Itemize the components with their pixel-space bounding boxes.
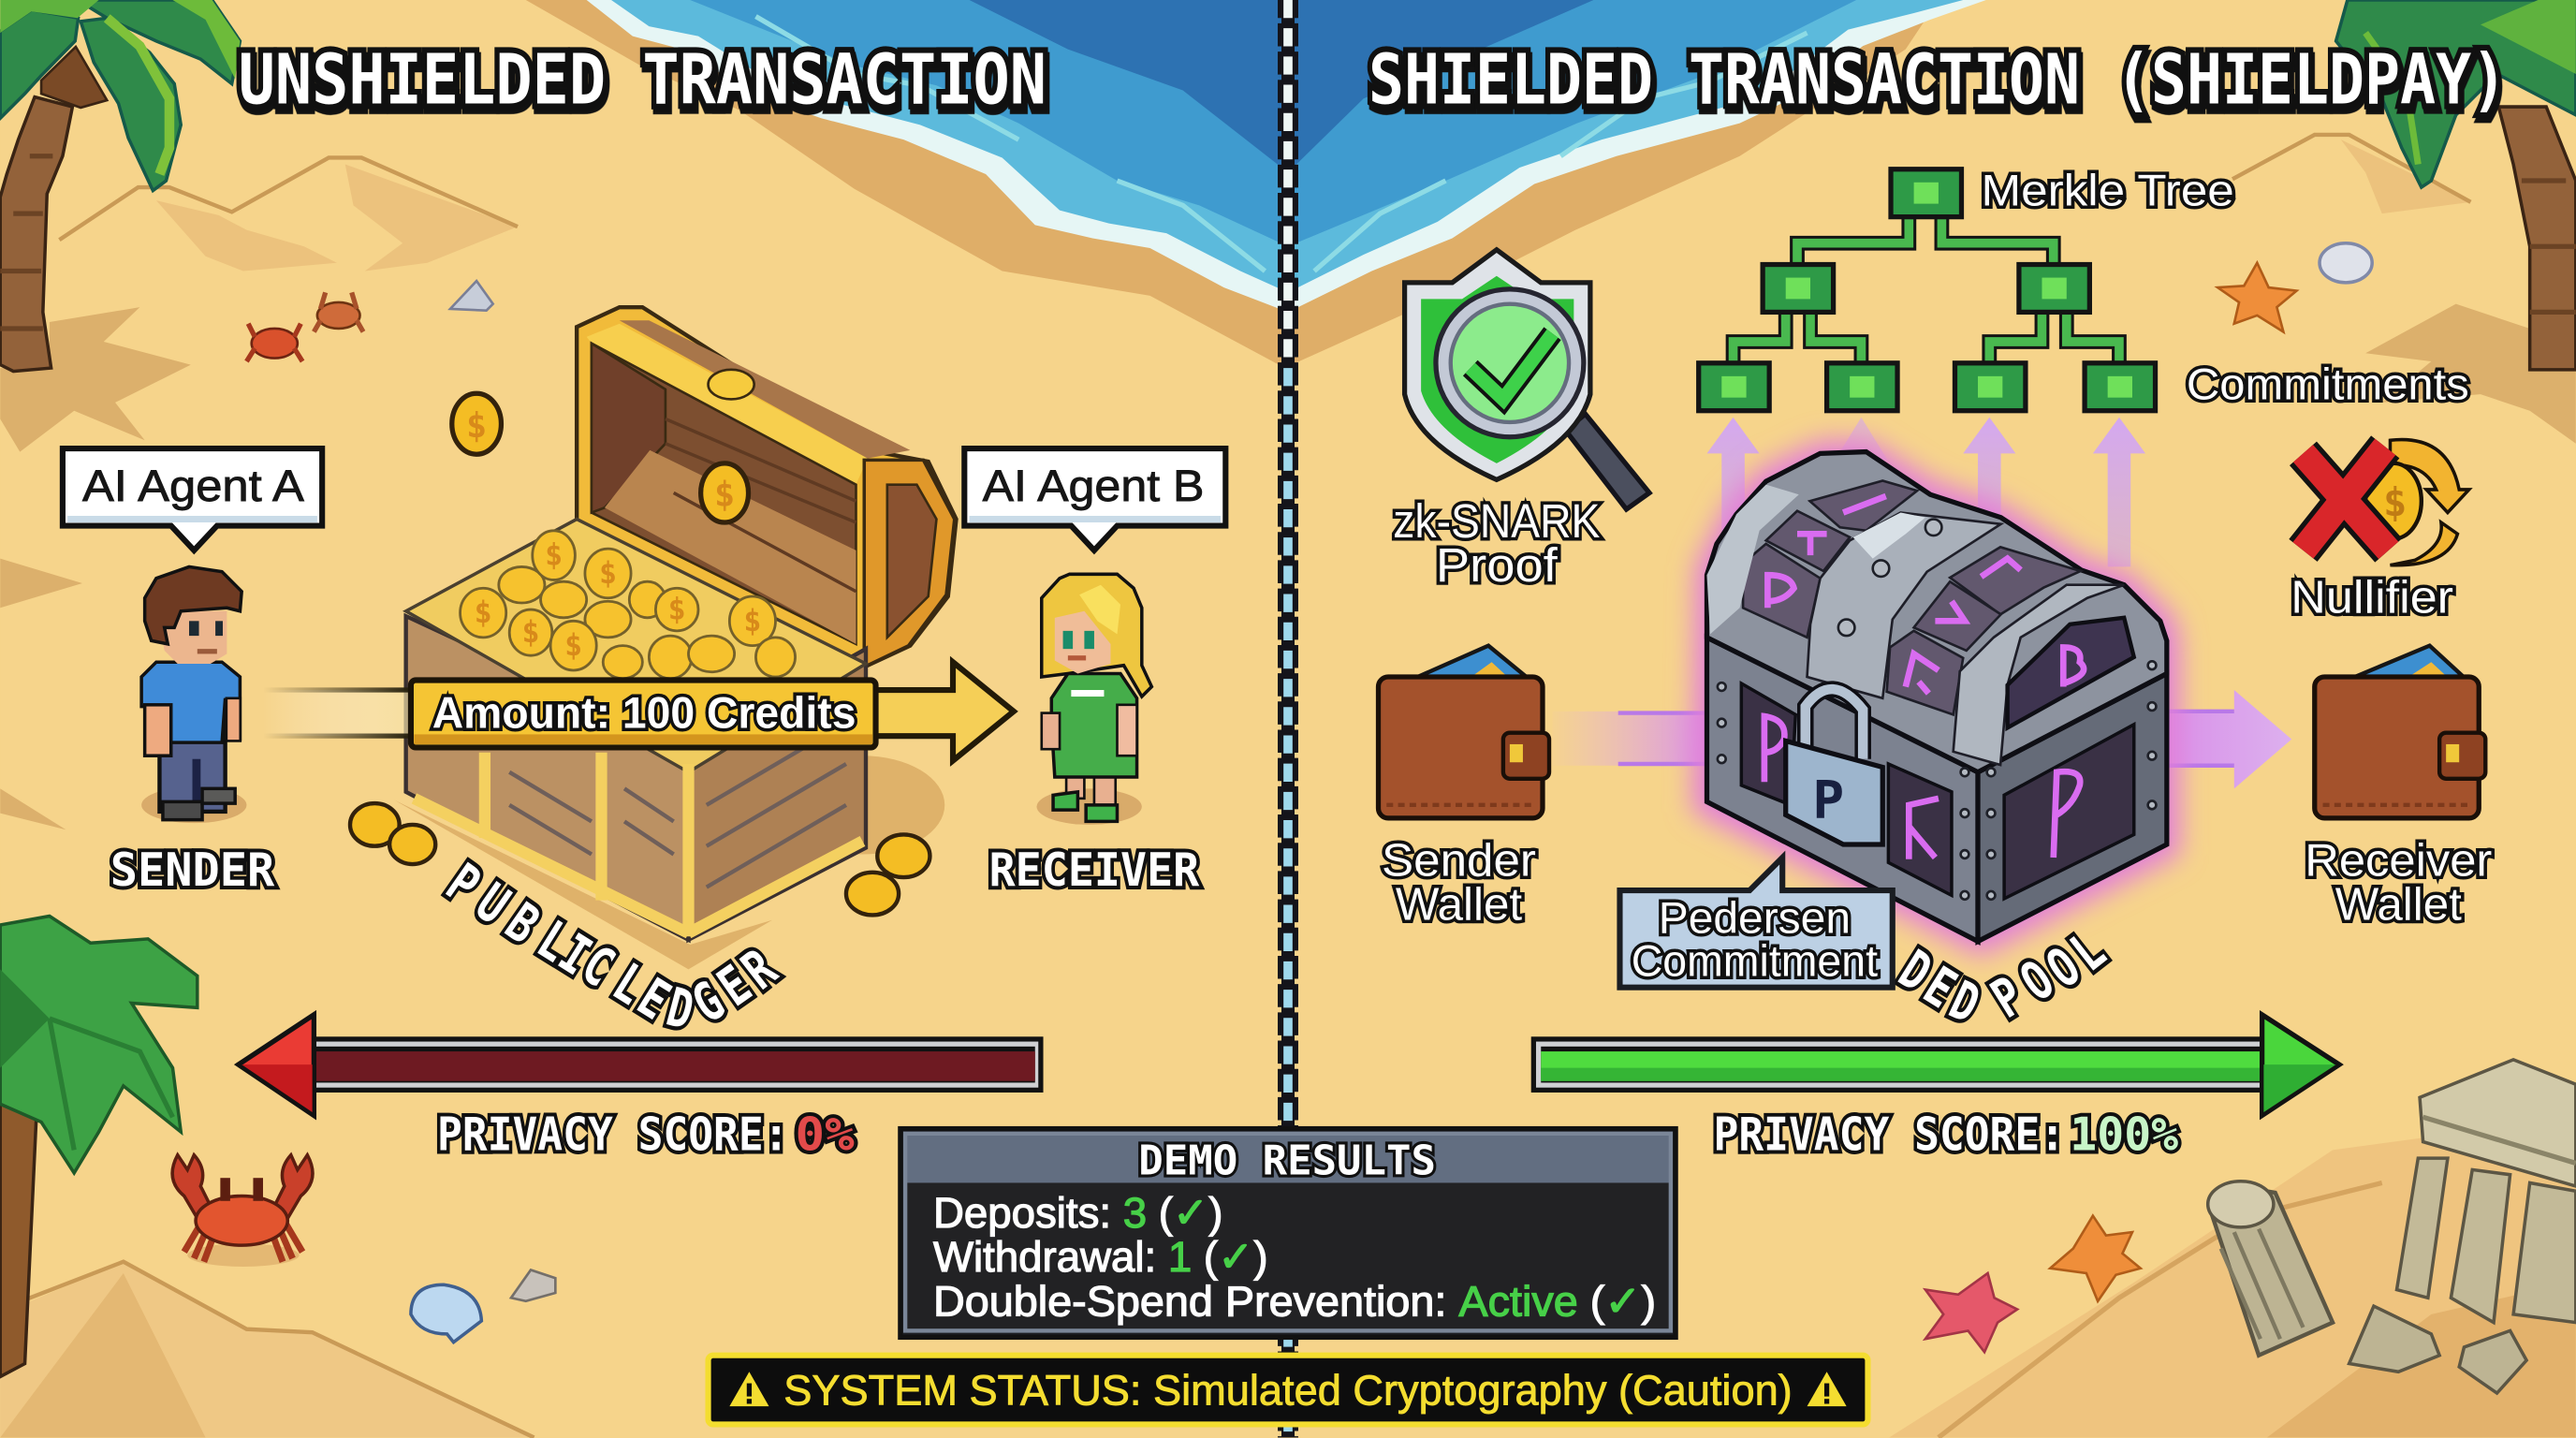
curved label: shielded pool: O bbox=[2036, 935, 2091, 1000]
curved label: public ledger: L bbox=[527, 908, 580, 975]
coin symbols: $ bbox=[743, 605, 761, 638]
label: zk-SNARK Proof bbox=[1393, 494, 1600, 592]
speech bubble: AI Agent B bbox=[964, 448, 1225, 550]
coin symbols: $ bbox=[545, 539, 563, 573]
label: Merkle Tree: Merkle Tree bbox=[1982, 166, 2234, 215]
character: receiver bbox=[1037, 574, 1151, 825]
status bar: system status bbox=[709, 1356, 1867, 1424]
speech bubble: AI Agent A bbox=[63, 448, 322, 550]
warning icon bbox=[729, 1372, 768, 1406]
callout: Pedersen Commitment: Pedersen bbox=[1659, 894, 1851, 944]
coin symbols: $ bbox=[522, 616, 540, 650]
label: receiver wallet: Receiver bbox=[2305, 835, 2492, 886]
label: zk-SNARK Proof: zk-SNARK bbox=[1393, 494, 1600, 548]
palm tree top right bbox=[2336, 0, 2576, 370]
coin symbols: $ bbox=[668, 594, 686, 627]
shell bbox=[2320, 243, 2372, 283]
purple flow into chest bbox=[1553, 712, 1717, 766]
curved label: public ledger bbox=[435, 851, 788, 1042]
panel: demo results bbox=[900, 1129, 1676, 1337]
panel: demo results: Withdrawal: 1 (✓) bbox=[933, 1233, 1268, 1281]
curved label: shielded pool: P bbox=[1981, 964, 2034, 1030]
privacy score left: 0% bbox=[796, 1107, 855, 1161]
amount label bbox=[411, 680, 876, 747]
label: sender wallet: Wallet bbox=[1396, 880, 1522, 931]
end panel bbox=[2008, 618, 2134, 727]
treasure chest: public ledger bbox=[394, 307, 957, 969]
padlock: P bbox=[1812, 770, 1844, 831]
starfish bbox=[2050, 1216, 2141, 1301]
privacy score right: PRIVACY SCORE: bbox=[1714, 1107, 2065, 1161]
curved label: shielded pool: E bbox=[1842, 915, 1877, 980]
nullifier icon: $ bbox=[2383, 479, 2407, 525]
panel: demo results: Double-Spend Prevention: Active (✓) bbox=[933, 1278, 1656, 1326]
merkle tree bbox=[1699, 169, 2156, 411]
warning icon bbox=[1808, 1372, 1847, 1406]
label: sender wallet: Sender bbox=[1382, 835, 1536, 886]
curved label: shielded pool: E bbox=[1913, 955, 1967, 1020]
rivets bbox=[1718, 520, 2156, 900]
curved label: shielded pool: O bbox=[2009, 948, 2065, 1013]
curved label: shielded pool: I bbox=[1822, 912, 1857, 977]
curved label: public ledger: L bbox=[603, 951, 656, 1017]
curved label: shielded pool: H bbox=[1800, 910, 1835, 976]
character: sender bbox=[141, 566, 246, 823]
speech bubble: AI Agent B: AI Agent B bbox=[983, 462, 1205, 511]
label: sender wallet bbox=[1382, 835, 1536, 931]
privacy score right: 100% bbox=[2070, 1107, 2179, 1161]
floating coin bbox=[452, 393, 501, 454]
amount label: Amount: 100 Credits bbox=[432, 688, 856, 738]
small crab bbox=[314, 292, 363, 331]
palm shadows bbox=[0, 304, 2576, 829]
transfer arrow with amount bbox=[263, 662, 1014, 760]
heading: DEMO RESULTS bbox=[1138, 1137, 1436, 1185]
rock bbox=[511, 1269, 555, 1301]
metal chest: shielded pool bbox=[1692, 440, 2180, 956]
curved label: public ledger: U bbox=[465, 871, 520, 936]
curved label: public ledger: P bbox=[435, 851, 491, 917]
curved label: shielded pool: L bbox=[1857, 917, 1901, 983]
upward commitment arrows bbox=[1706, 418, 2145, 566]
left panel title: UNSHIELDED TRANSACTION bbox=[239, 41, 1046, 121]
floating coin: $ bbox=[714, 474, 735, 514]
palm tree top left bbox=[0, 0, 240, 372]
curved label: shielded pool: D bbox=[1889, 938, 1942, 1004]
curved label: public ledger: D bbox=[661, 976, 700, 1042]
receiver wallet bbox=[2315, 646, 2485, 818]
shield magnifier: zk-SNARK proof bbox=[1405, 250, 1649, 509]
curved label: shielded pool: S bbox=[1777, 907, 1811, 973]
label: zk-SNARK Proof: Proof bbox=[1436, 538, 1559, 592]
chest body bbox=[406, 520, 866, 940]
center divider bbox=[1284, 0, 1292, 1437]
speech bubble: AI Agent A: AI Agent A bbox=[82, 462, 304, 511]
coin symbols: $ bbox=[475, 596, 492, 630]
fallen column bbox=[2208, 1181, 2333, 1356]
curved label: public ledger: C bbox=[571, 933, 625, 999]
result lines: Deposits: 3 (✓) bbox=[933, 1189, 1222, 1237]
palm tree bottom left bbox=[0, 916, 198, 1377]
coin symbols: $ bbox=[599, 557, 617, 591]
rock bbox=[450, 281, 493, 311]
lid bands bbox=[1808, 513, 2001, 698]
padlock bbox=[1786, 689, 1882, 844]
glowing runes bbox=[1764, 496, 2084, 859]
left ocean bbox=[526, 0, 1288, 370]
curved label: public ledger: R bbox=[730, 937, 788, 1001]
lid panels bbox=[1743, 480, 2081, 714]
rubble bbox=[2349, 1306, 2526, 1393]
curved label: shielded pool: L bbox=[2059, 919, 2116, 983]
starfish bbox=[2217, 263, 2296, 331]
label: Commitments: Commitments bbox=[2187, 360, 2469, 409]
curved label: shielded pool: D bbox=[1940, 969, 1989, 1035]
spilled coins bbox=[350, 803, 929, 915]
tree nodes bbox=[1699, 169, 2156, 411]
privacy score left: PRIVACY SCORE: bbox=[437, 1107, 789, 1161]
callout: Pedersen Commitment: Commitment bbox=[1632, 936, 1878, 986]
small crab bbox=[246, 324, 302, 361]
coin symbols bbox=[475, 539, 761, 663]
curved label: public ledger: I bbox=[549, 921, 602, 988]
chest side panels bbox=[1741, 683, 2134, 899]
curved label: public ledger: E bbox=[627, 966, 681, 1032]
privacy bar: 0% bbox=[239, 1015, 1044, 1116]
label: receiver wallet: Wallet bbox=[2335, 880, 2462, 931]
coin symbols: $ bbox=[564, 629, 582, 663]
coin pile bbox=[461, 531, 796, 679]
label: receiver wallet bbox=[2305, 835, 2492, 931]
purple flow out of chest bbox=[2152, 690, 2291, 788]
floating coin bbox=[701, 463, 749, 522]
shell bbox=[411, 1284, 481, 1343]
ruined temple bbox=[2397, 1060, 2576, 1323]
big crab bbox=[172, 1155, 313, 1267]
curved label: public ledger: G bbox=[682, 969, 734, 1035]
floating coin: $ bbox=[466, 405, 487, 446]
label: receiver: RECEIVER bbox=[989, 843, 1200, 897]
starfish bbox=[1925, 1273, 2017, 1352]
curved label: public ledger: E bbox=[707, 953, 762, 1019]
right ocean bbox=[1288, 0, 1986, 366]
chest lid bbox=[1706, 452, 2167, 772]
label: Nullifier: Nullifier bbox=[2291, 573, 2453, 624]
chest lid bbox=[577, 307, 957, 667]
callout: Pedersen Commitment bbox=[1619, 858, 1893, 988]
status bar: system status: SYSTEM STATUS: Simulated Cryptography (Caution) bbox=[783, 1366, 1793, 1414]
privacy bar: 100% bbox=[1531, 1015, 2339, 1116]
curved label: shielded pool bbox=[1777, 907, 2116, 1035]
tree connectors bbox=[1734, 215, 2119, 365]
nullifier icon bbox=[2303, 440, 2469, 565]
sender wallet bbox=[1379, 646, 1549, 818]
label: sender: SENDER bbox=[110, 843, 275, 897]
curved label: public ledger: B bbox=[495, 890, 550, 956]
